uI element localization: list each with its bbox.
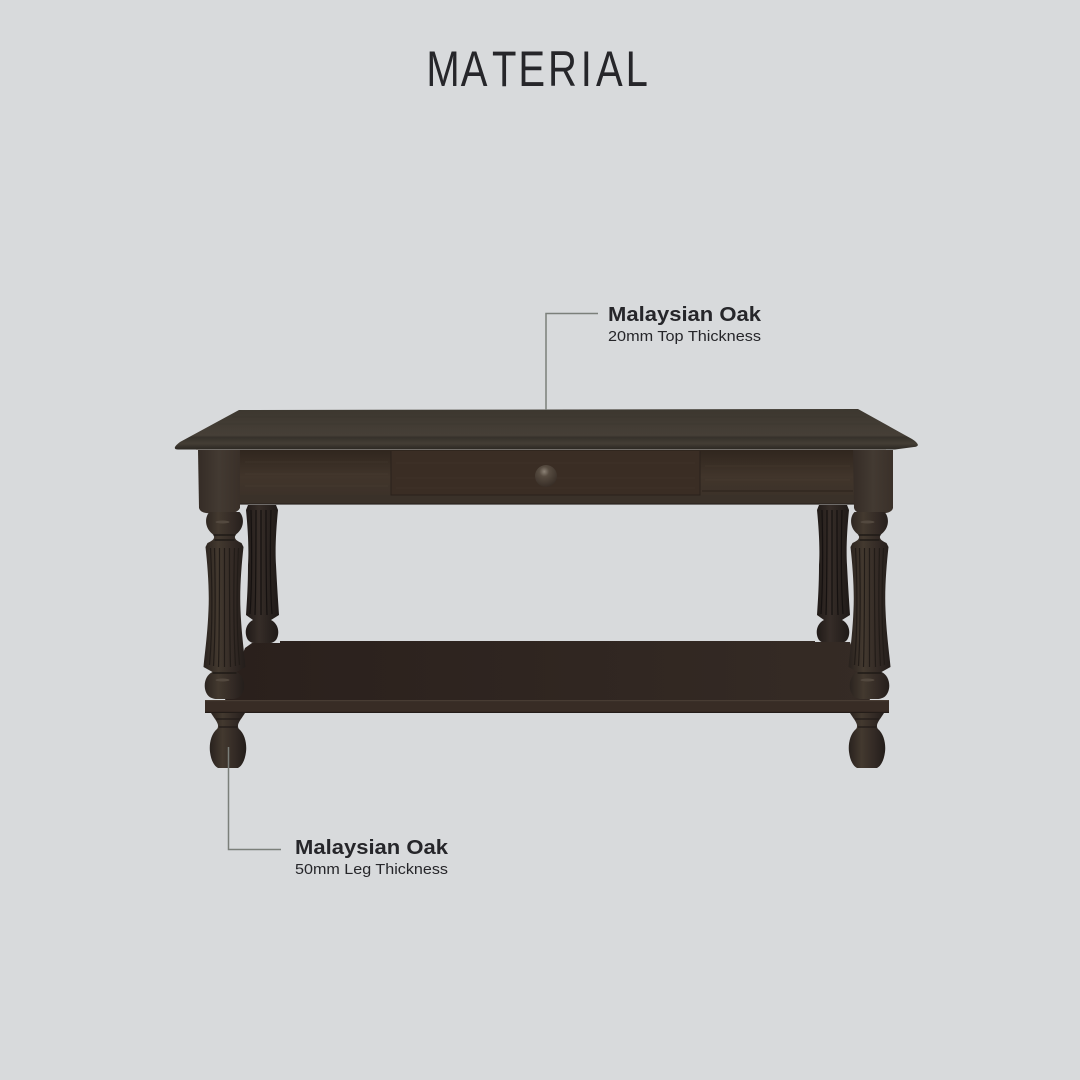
drawer knob: [535, 465, 557, 487]
leader line: top: [546, 314, 598, 410]
apron: [238, 450, 855, 505]
table top: [175, 409, 918, 450]
title: MATERIAL: [426, 41, 648, 97]
lower shelf: [205, 641, 889, 713]
label: Malaysian Oak leg: Malaysian Oak: [295, 837, 449, 859]
leader line: leg: [228, 747, 281, 850]
front legs: [204, 512, 890, 699]
corner posts: [198, 450, 893, 514]
feet: [210, 713, 885, 768]
label: leg thickness: 50mm Leg Thickness: [295, 861, 448, 878]
label: top thickness: 20mm Top Thickness: [608, 328, 761, 345]
callout: leg thickness: [228, 747, 449, 878]
callout: top thickness: [546, 304, 762, 410]
table illustration: [175, 409, 918, 768]
label: Malaysian Oak top: Malaysian Oak: [608, 304, 762, 326]
back legs: [246, 505, 850, 643]
drawer front: [391, 451, 700, 495]
